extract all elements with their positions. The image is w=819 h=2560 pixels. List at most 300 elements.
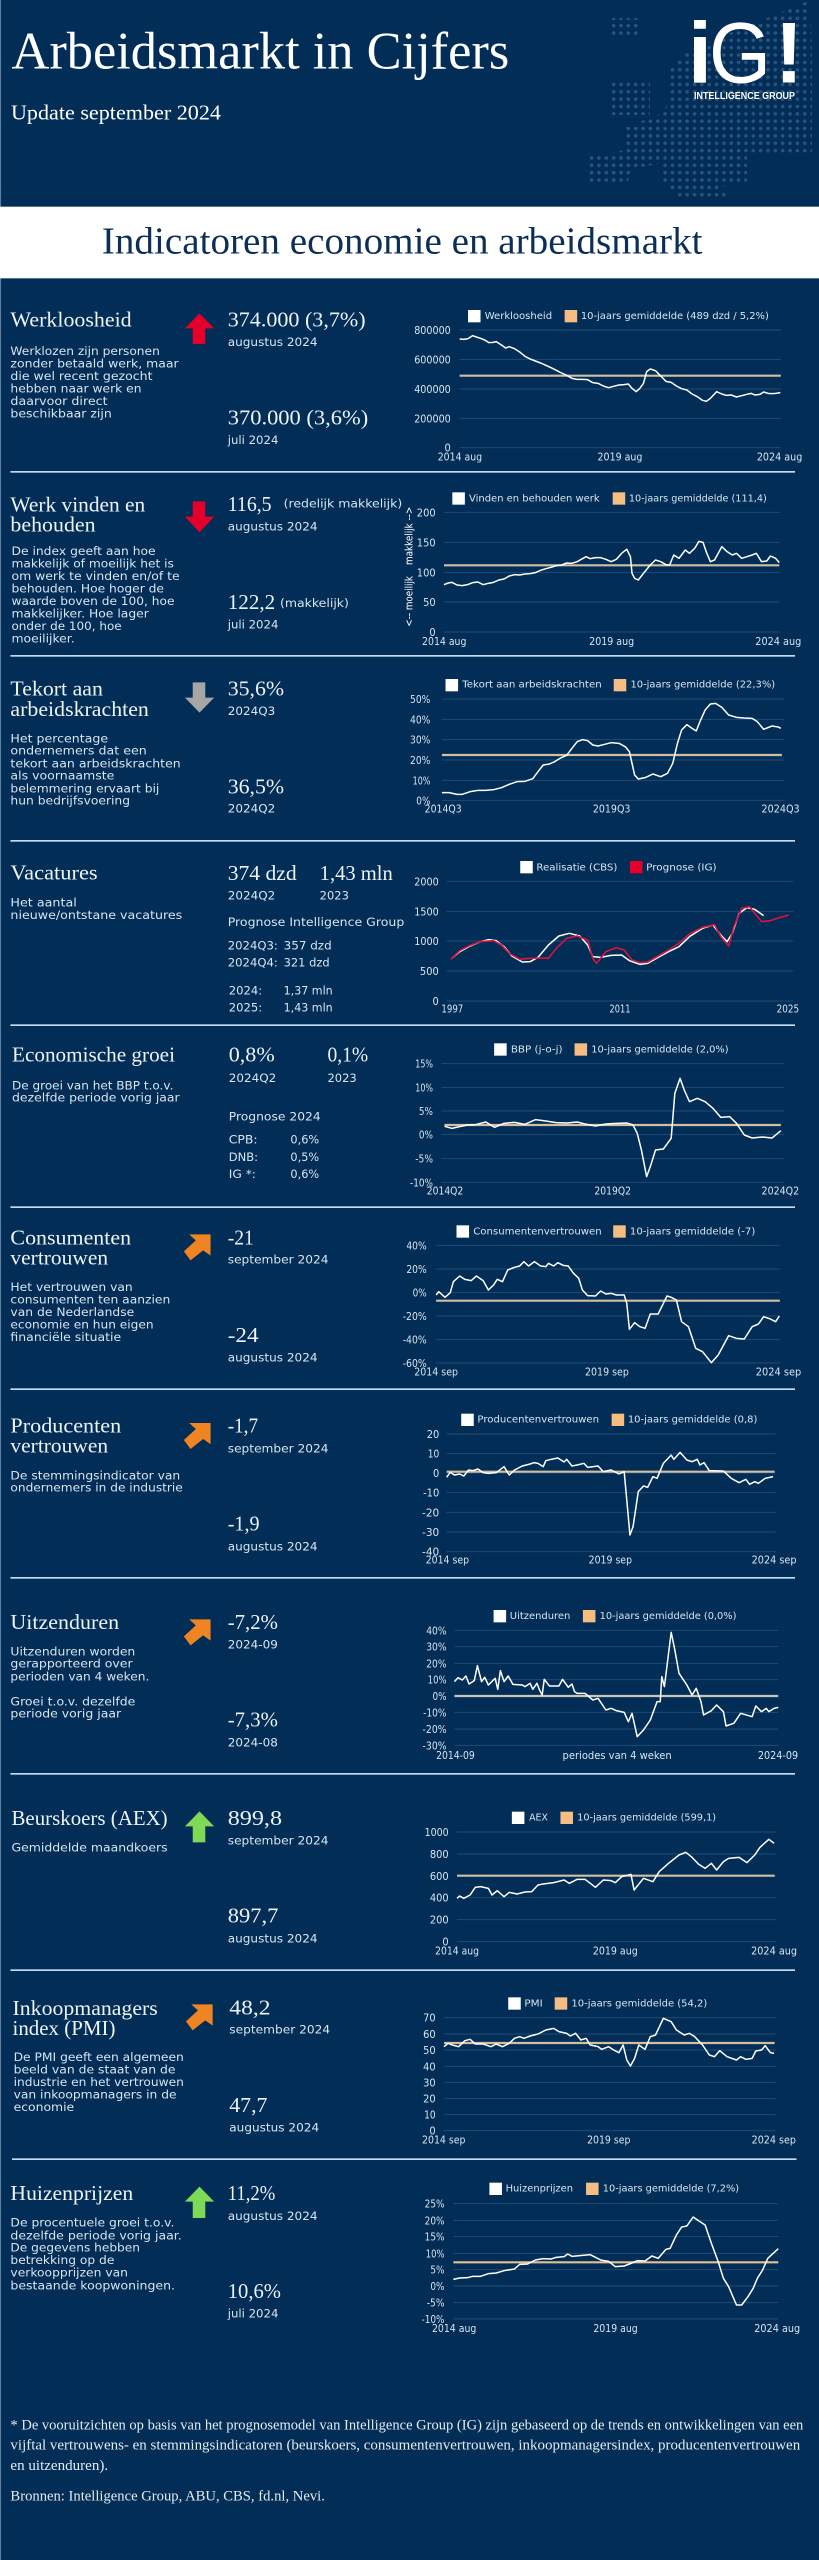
panel: Consumentenvertrouwen <box>10 1225 801 1379</box>
heading <box>10 677 149 721</box>
panel: Werkloosheid <box>10 308 802 464</box>
line chart: tekort aan arbeidskrachten: 30% <box>410 735 430 747</box>
forecast: 1,43 mln <box>284 1001 333 1015</box>
line chart: PMI: 30 <box>423 2077 436 2089</box>
line chart: producentenvertrouwen: 0 <box>433 1468 439 1480</box>
line chart: AEX: 2014 aug <box>435 1945 479 1957</box>
line chart: consumentenvertrouwen: -20% <box>403 1311 427 1323</box>
description: makkelijker. Hoe lager <box>11 607 150 620</box>
line chart: uitzenduren: 10% <box>428 1675 447 1687</box>
description <box>10 2216 182 2292</box>
previous value: 122,2 <box>228 591 275 614</box>
forecast: 2025: <box>229 1001 262 1015</box>
line chart: uitzenduren: 0% <box>432 1691 447 1703</box>
heading <box>13 1997 158 2040</box>
forecast: 2024Q4: <box>228 956 278 970</box>
line chart: PMI: 2019 sep <box>587 2134 630 2146</box>
forecast: 357 dzd <box>284 939 332 952</box>
current value <box>228 308 366 349</box>
line chart: consumentenvertrouwen: 2019 sep <box>585 1367 629 1379</box>
line chart: PMI: 10-jaars gemiddelde (54,2) <box>571 1998 707 2009</box>
line chart: PMI: 50 <box>423 2045 436 2057</box>
previous value <box>229 2094 319 2135</box>
line chart: PMI: 2014 sep <box>422 2134 465 2146</box>
line chart: AEX: 2019 aug <box>593 1945 638 1957</box>
heading: Inkoopmanagers <box>13 1997 158 2020</box>
description: Groei t.o.v. dezelfde <box>10 1695 135 1708</box>
footnote and sources: en uitzenduren). <box>10 2458 108 2474</box>
current value: 48,2 <box>229 1996 271 2019</box>
heading: Uitzenduren <box>10 1611 119 1634</box>
line chart: BBP: -10% <box>410 1177 433 1189</box>
line chart: vinden en behouden werk: Vinden en behouden werk <box>469 493 600 504</box>
current value: 2024-09 <box>228 1638 278 1652</box>
heading: Huizenprijzen <box>10 2182 134 2205</box>
current value: augustus 2024 <box>228 335 318 349</box>
line chart: vinden en behouden werk <box>404 492 801 648</box>
heading: Economische groei <box>12 1043 175 1066</box>
icon: orange arrow up-right <box>184 1423 211 1449</box>
previous value: augustus 2024 <box>229 2121 319 2135</box>
previous value: 370.000 (3,6%) <box>228 406 368 429</box>
line chart: vinden en behouden werk: 50 <box>423 597 436 609</box>
description <box>10 1469 183 1495</box>
line chart: tekort aan arbeidskrachten: 20% <box>410 755 430 767</box>
description: industrie en het vertrouwen <box>14 2075 184 2089</box>
logo <box>688 6 803 102</box>
description: dezelfde periode vorig jaar <box>12 1091 180 1105</box>
line chart: werkloosheid: 2019 aug <box>598 452 642 464</box>
line chart: vinden en behouden werk: makkelijk --> <box>404 507 416 565</box>
description: ondernemers in de industrie <box>10 1481 183 1495</box>
current value: september 2024 <box>228 1834 329 1848</box>
description: dezelfde periode vorig jaar. <box>10 2229 182 2242</box>
line chart: AEX: 200 <box>430 1915 449 1927</box>
description <box>11 544 180 645</box>
line chart: producentenvertrouwen: -10 <box>423 1488 439 1500</box>
line chart: AEX: 600 <box>430 1871 449 1883</box>
line chart: consumentenvertrouwen: 2014 sep <box>414 1367 458 1379</box>
previous value: juli 2024 <box>227 2307 278 2321</box>
line chart: AEX: 1000 <box>425 1827 449 1839</box>
line chart: PMI: PMI <box>524 1998 543 2009</box>
line chart: werkloosheid: 2014 aug <box>438 452 482 464</box>
subtitle: Update september 2024 <box>11 101 221 125</box>
description: De index geeft aan hoe <box>11 544 156 558</box>
heading <box>10 1226 131 1269</box>
description: hun bedrijfsvoering <box>10 794 130 808</box>
current value: september 2024 <box>228 1442 329 1455</box>
line chart: uitzenduren: 10-jaars gemiddelde (0,0%) <box>600 1611 736 1622</box>
description: beeld van de staat van de <box>14 2063 176 2076</box>
panel: Inkoopmanagers index (PMI) <box>13 1996 796 2146</box>
line chart: BBP: 2014Q2 <box>427 1185 463 1197</box>
previous value <box>227 2280 281 2321</box>
description: die wel recent gezocht <box>10 369 153 383</box>
line chart: werkloosheid <box>414 310 802 464</box>
description: moeilijker. <box>11 632 75 645</box>
line chart: PMI <box>422 1997 796 2146</box>
line chart: PMI: 0 <box>429 2126 436 2138</box>
previous value: -1,9 <box>228 1512 260 1535</box>
description: betrekking op de <box>10 2253 114 2267</box>
heading: Vacatures <box>10 861 98 884</box>
line chart: uitzenduren: -20% <box>423 1724 447 1736</box>
description: perioden van 4 weken. <box>10 1670 149 1683</box>
current value: 2024Q3 <box>228 704 275 718</box>
header banner <box>11 0 812 198</box>
line chart: vinden en behouden werk: 150 <box>417 537 436 549</box>
description: makkelijk of moeilijk het is <box>11 557 174 570</box>
line chart: producentenvertrouwen <box>422 1414 797 1567</box>
line chart: vacatures: 1997 <box>441 1004 463 1016</box>
panel: Werk vinden en behouden <box>10 492 801 648</box>
current value: september 2024 <box>228 1253 329 1267</box>
description: waarde boven de 100, hoe <box>11 594 174 608</box>
line chart: BBP: -5% <box>415 1154 433 1166</box>
description: Het percentage <box>10 732 108 745</box>
description: financiële situatie <box>10 1330 121 1344</box>
description: consumenten ten aanzien <box>10 1293 170 1306</box>
description: onder de 100, hoe <box>11 619 122 633</box>
previous value <box>228 1708 278 1749</box>
heading: Werkloosheid <box>10 308 132 331</box>
description: Gemiddelde maandkoers <box>11 1841 168 1855</box>
current values: 0,8% <box>229 1043 275 1066</box>
line chart: AEX: AEX <box>529 1812 548 1824</box>
line chart: uitzenduren <box>423 1610 798 1762</box>
line chart: BBP: 2019Q2 <box>594 1185 631 1197</box>
description: om werk te vinden en/of te <box>11 569 180 583</box>
line chart: vacatures: 2025 <box>777 1004 799 1016</box>
logo: G <box>709 6 771 102</box>
forecast: 0,5% <box>290 1150 319 1164</box>
previous value: augustus 2024 <box>228 1351 318 1364</box>
line chart: producentenvertrouwen: Producentenvertrouwen <box>477 1414 599 1426</box>
current value: (redelijk makkelijk) <box>284 497 402 511</box>
line chart: tekort aan arbeidskrachten: Tekort aan arbeidskrachten <box>461 679 602 691</box>
icon: grey arrow down <box>185 682 214 713</box>
line chart: huizenprijzen: Huizenprijzen <box>506 2183 573 2195</box>
line chart: AEX: 400 <box>430 1893 449 1905</box>
line chart: huizenprijzen: 10-jaars gemiddelde (7,2%) <box>603 2183 739 2195</box>
line chart: vinden en behouden werk: 100 <box>417 567 436 579</box>
line chart: vacatures: 1000 <box>414 936 439 948</box>
forecast: 2024: <box>229 984 262 998</box>
line chart: werkloosheid: 800000 <box>414 325 451 337</box>
icon: orange arrow up-right <box>186 2004 213 2030</box>
description: nieuwe/ontstane vacatures <box>10 908 182 922</box>
previous value: 897,7 <box>228 1904 278 1927</box>
line chart: vacatures: Prognose (IG) <box>646 862 717 873</box>
line chart: PMI: 60 <box>423 2029 436 2041</box>
current values: 2024Q2 <box>228 889 275 902</box>
current value <box>229 1996 330 2037</box>
line chart: huizenprijzen: -5% <box>427 2298 445 2310</box>
description: De procentuele groei t.o.v. <box>10 2216 174 2230</box>
current value <box>228 1226 329 1267</box>
line chart: PMI: 40 <box>423 2061 436 2073</box>
current value <box>228 1611 278 1652</box>
description: ondernemers dat een <box>10 744 147 758</box>
line chart: huizenprijzen: 10% <box>426 2248 445 2260</box>
line chart: vacatures: 2000 <box>414 876 439 888</box>
line chart: vacatures: 2011 <box>610 1004 630 1016</box>
line chart: huizenprijzen: 0% <box>430 2281 445 2293</box>
current values: 0,1% <box>327 1043 368 1066</box>
line chart: BBP: 5% <box>419 1106 433 1118</box>
description <box>14 2050 184 2114</box>
forecast <box>228 915 404 1015</box>
previous value <box>228 1512 318 1553</box>
line chart: werkloosheid: 400000 <box>414 384 451 396</box>
previous value: 47,7 <box>229 2094 267 2117</box>
line chart: huizenprijzen: 5% <box>430 2265 445 2277</box>
footnote and sources <box>10 2417 804 2504</box>
current value: -7,2% <box>228 1611 278 1634</box>
forecast: CPB: <box>229 1133 258 1147</box>
line chart: vacatures <box>414 861 799 1016</box>
icon: orange arrow up-right <box>184 1234 211 1260</box>
line chart: BBP: 10% <box>415 1082 433 1094</box>
line chart: tekort aan arbeidskrachten: 40% <box>410 714 430 726</box>
line chart: consumentenvertrouwen: 0% <box>413 1287 427 1299</box>
panel: Vacatures <box>10 861 799 1016</box>
current value <box>228 677 284 718</box>
panel: Producentenvertrouwen <box>10 1414 797 1567</box>
current value <box>228 493 402 534</box>
heading <box>10 493 146 536</box>
current value <box>228 1414 329 1455</box>
current values: 2023 <box>327 1071 357 1085</box>
previous value: augustus 2024 <box>228 1932 318 1945</box>
line chart: vacatures: Realisatie (CBS) <box>536 862 617 873</box>
current value <box>228 1807 329 1848</box>
line chart: uitzenduren: 20% <box>426 1658 447 1670</box>
line chart: werkloosheid: 200000 <box>414 413 451 425</box>
current value <box>228 2182 318 2223</box>
line chart: AEX: 10-jaars gemiddelde (599,1) <box>577 1812 716 1824</box>
section heading band <box>0 207 819 278</box>
previous value: -24 <box>228 1324 259 1347</box>
forecast: 1,37 mln <box>284 984 333 998</box>
line chart: huizenprijzen: -10% <box>422 2314 445 2326</box>
icon: green arrow up <box>185 1811 214 1842</box>
world dot map <box>590 0 812 198</box>
description: De gegevens hebben <box>10 2241 140 2255</box>
heading: Beurskoers (AEX) <box>11 1807 168 1830</box>
heading: Tekort aan <box>10 677 103 700</box>
panel: Economische groei <box>12 1043 799 1197</box>
description <box>10 1280 170 1344</box>
previous value: augustus 2024 <box>228 1540 318 1553</box>
previous value: 2024-08 <box>228 1736 278 1749</box>
line chart: uitzenduren: -30% <box>423 1740 447 1752</box>
line chart: consumentenvertrouwen: 20% <box>406 1264 427 1276</box>
current value: augustus 2024 <box>228 2209 318 2223</box>
previous value: juli 2024 <box>227 433 278 447</box>
line chart: vinden en behouden werk: 2019 aug <box>589 636 634 648</box>
line chart: vacatures: 0 <box>432 996 439 1008</box>
line chart: vacatures: 1500 <box>414 906 439 918</box>
description: als voornaamste <box>10 769 114 783</box>
line chart: PMI: 70 <box>423 2013 436 2025</box>
line chart: producentenvertrouwen: -20 <box>422 1507 439 1519</box>
panel: Tekort aan arbeidskrachten <box>10 677 800 816</box>
line chart: producentenvertrouwen: 2019 sep <box>589 1555 632 1567</box>
panel: Uitzenduren <box>10 1610 798 1762</box>
heading: Werk vinden en <box>10 493 146 516</box>
heading: Producenten <box>10 1414 122 1437</box>
description: tekort aan arbeidskrachten <box>10 757 181 770</box>
forecast: Prognose Intelligence Group <box>228 915 404 929</box>
line chart: tekort aan arbeidskrachten: 2019Q3 <box>593 804 630 816</box>
line chart: producentenvertrouwen: -40 <box>422 1547 439 1559</box>
line chart: huizenprijzen <box>422 2183 800 2335</box>
line chart: BBP: BBP (j-o-j) <box>511 1044 563 1055</box>
previous value: juli 2024 <box>227 618 278 631</box>
description: De groei van het BBP t.o.v. <box>12 1079 173 1092</box>
heading: vertrouwen <box>10 1434 108 1457</box>
forecast: 321 dzd <box>284 956 330 970</box>
line chart: PMI: 20 <box>423 2094 436 2106</box>
previous value: 2024Q2 <box>228 802 275 816</box>
current value: -21 <box>228 1226 254 1249</box>
line chart: uitzenduren: periodes van 4 weken <box>563 1750 672 1762</box>
description: economie en hun eigen <box>10 1318 154 1331</box>
description <box>10 344 179 420</box>
panel: Huizenprijzen <box>10 2182 800 2335</box>
description: economie <box>14 2100 74 2114</box>
logo: i <box>688 6 712 102</box>
line chart: consumentenvertrouwen: -60% <box>403 1358 427 1370</box>
current value: september 2024 <box>229 2023 330 2037</box>
line chart: consumentenvertrouwen: -40% <box>403 1335 427 1347</box>
line chart: producentenvertrouwen: 20 <box>427 1429 439 1441</box>
description: Uitzenduren worden <box>10 1645 135 1658</box>
line chart: tekort aan arbeidskrachten: 2014Q3 <box>425 804 462 816</box>
description <box>10 896 182 922</box>
current values <box>229 1043 368 1085</box>
line chart: tekort aan arbeidskrachten: 50% <box>410 694 430 706</box>
forecast: 2024Q3: <box>228 939 278 952</box>
description: periode vorig jaar <box>10 1707 122 1721</box>
description <box>10 732 181 808</box>
current value: 899,8 <box>228 1807 282 1830</box>
line chart: AEX: 0 <box>442 1937 449 1949</box>
forecast <box>229 1110 321 1181</box>
line chart: huizenprijzen: 2014 aug <box>432 2323 476 2335</box>
line chart: huizenprijzen: 20% <box>425 2215 445 2227</box>
previous value: (makkelijk) <box>280 596 349 610</box>
icon: orange arrow up-right <box>184 1619 211 1645</box>
footnote and sources: Bronnen: Intelligence Group, ABU, CBS, fd.nl, Nevi. <box>10 2488 325 2504</box>
panel: Beurskoers AEX <box>11 1807 797 1957</box>
description: Werklozen zijn personen <box>10 344 160 358</box>
icon: red arrow up <box>185 313 214 344</box>
line chart: uitzenduren: 2014-09 <box>436 1750 475 1762</box>
previous value <box>227 406 368 447</box>
previous value <box>228 1324 318 1364</box>
line chart: huizenprijzen: 15% <box>425 2232 445 2244</box>
description: Het vertrouwen van <box>10 1280 133 1294</box>
heading: Consumenten <box>10 1226 131 1249</box>
line chart: tekort aan arbeidskrachten <box>410 679 800 816</box>
line chart: werkloosheid: 0 <box>444 443 451 455</box>
description: behouden. Hoe hoger de <box>11 582 164 595</box>
current value: augustus 2024 <box>228 520 318 534</box>
line chart: consumentenvertrouwen: 10-jaars gemiddelde (-7) <box>630 1226 755 1237</box>
forecast: IG *: <box>229 1167 256 1181</box>
logo: ! <box>775 6 803 102</box>
description: daarvoor direct <box>10 394 108 408</box>
line chart: producentenvertrouwen: -30 <box>422 1527 439 1539</box>
line chart: BBP: 10-jaars gemiddelde (2,0%) <box>591 1044 729 1055</box>
line chart: producentenvertrouwen: 10 <box>428 1449 439 1461</box>
line chart: BBP: 15% <box>415 1059 433 1071</box>
forecast: 0,6% <box>290 1167 319 1181</box>
line chart: vinden en behouden werk: 2014 aug <box>422 636 466 648</box>
heading: behouden <box>10 513 96 536</box>
description: hebben naar werk en <box>10 382 142 395</box>
description: zonder betaald werk, maar <box>10 357 179 370</box>
line chart: werkloosheid: Werkloosheid <box>485 311 552 322</box>
description: van inkoopmanagers in de <box>14 2088 177 2101</box>
line chart: consumentenvertrouwen <box>403 1225 801 1379</box>
description: beschikbaar zijn <box>10 407 112 420</box>
line chart: werkloosheid: 600000 <box>414 354 451 366</box>
current value: 11,2% <box>228 2182 275 2205</box>
previous value: 36,5% <box>228 775 284 798</box>
forecast: 0,6% <box>290 1133 319 1147</box>
line chart: vinden en behouden werk: <-- moeilijk <box>404 575 416 627</box>
line chart: vinden en behouden werk: 200 <box>417 507 436 519</box>
description: verkoopprijzen van <box>10 2266 128 2280</box>
current values: 2023 <box>320 889 349 902</box>
description: van de Nederlandse <box>10 1305 134 1319</box>
current values: 2024Q2 <box>229 1071 276 1085</box>
description: bestaande koopwoningen. <box>10 2279 175 2292</box>
heading: vertrouwen <box>10 1246 108 1269</box>
line chart: tekort aan arbeidskrachten: 0% <box>416 795 430 807</box>
line chart: uitzenduren: -10% <box>423 1707 447 1719</box>
current values: 1,43 mln <box>320 862 393 885</box>
description: belemmering ervaart bij <box>10 782 159 795</box>
heading: arbeidskrachten <box>10 698 149 721</box>
description: De stemmingsindicator van <box>10 1469 180 1482</box>
title: Arbeidsmarkt in Cijfers <box>11 21 509 80</box>
heading <box>10 1414 122 1457</box>
current value: -1,7 <box>228 1414 258 1437</box>
previous value: 10,6% <box>228 2280 281 2303</box>
forecast: DNB: <box>229 1150 258 1164</box>
previous value: -7,3% <box>228 1708 278 1731</box>
previous value <box>228 775 284 816</box>
line chart: producentenvertrouwen: 2014 sep <box>426 1555 469 1567</box>
line chart: consumentenvertrouwen: 40% <box>406 1240 427 1252</box>
line chart: vacatures: 500 <box>420 966 439 978</box>
line chart: huizenprijzen: 25% <box>425 2199 445 2211</box>
description: gerapporteerd over <box>10 1657 133 1671</box>
logo: INTELLIGENCE GROUP <box>694 91 795 102</box>
description: De PMI geeft een algemeen <box>14 2050 184 2064</box>
previous value <box>227 591 349 631</box>
line chart: tekort aan arbeidskrachten: 10% <box>413 775 430 787</box>
line chart: AEX <box>425 1812 797 1957</box>
line chart: BBP <box>410 1043 799 1197</box>
heading: index (PMI) <box>13 2017 115 2040</box>
line chart: AEX: 800 <box>430 1849 449 1861</box>
